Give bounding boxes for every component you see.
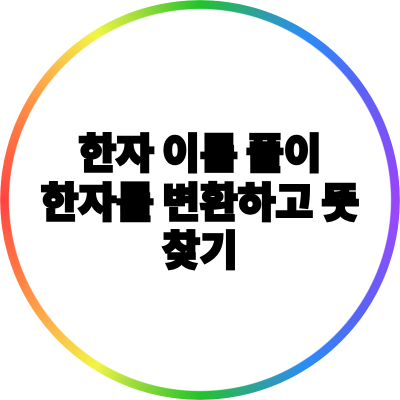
- title: [40, 131, 359, 274]
- title: 한자 이름 풀이: [78, 131, 322, 177]
- title: 찾기: [162, 228, 238, 274]
- title: 한자를 변환하고 뜻: [41, 180, 359, 226]
